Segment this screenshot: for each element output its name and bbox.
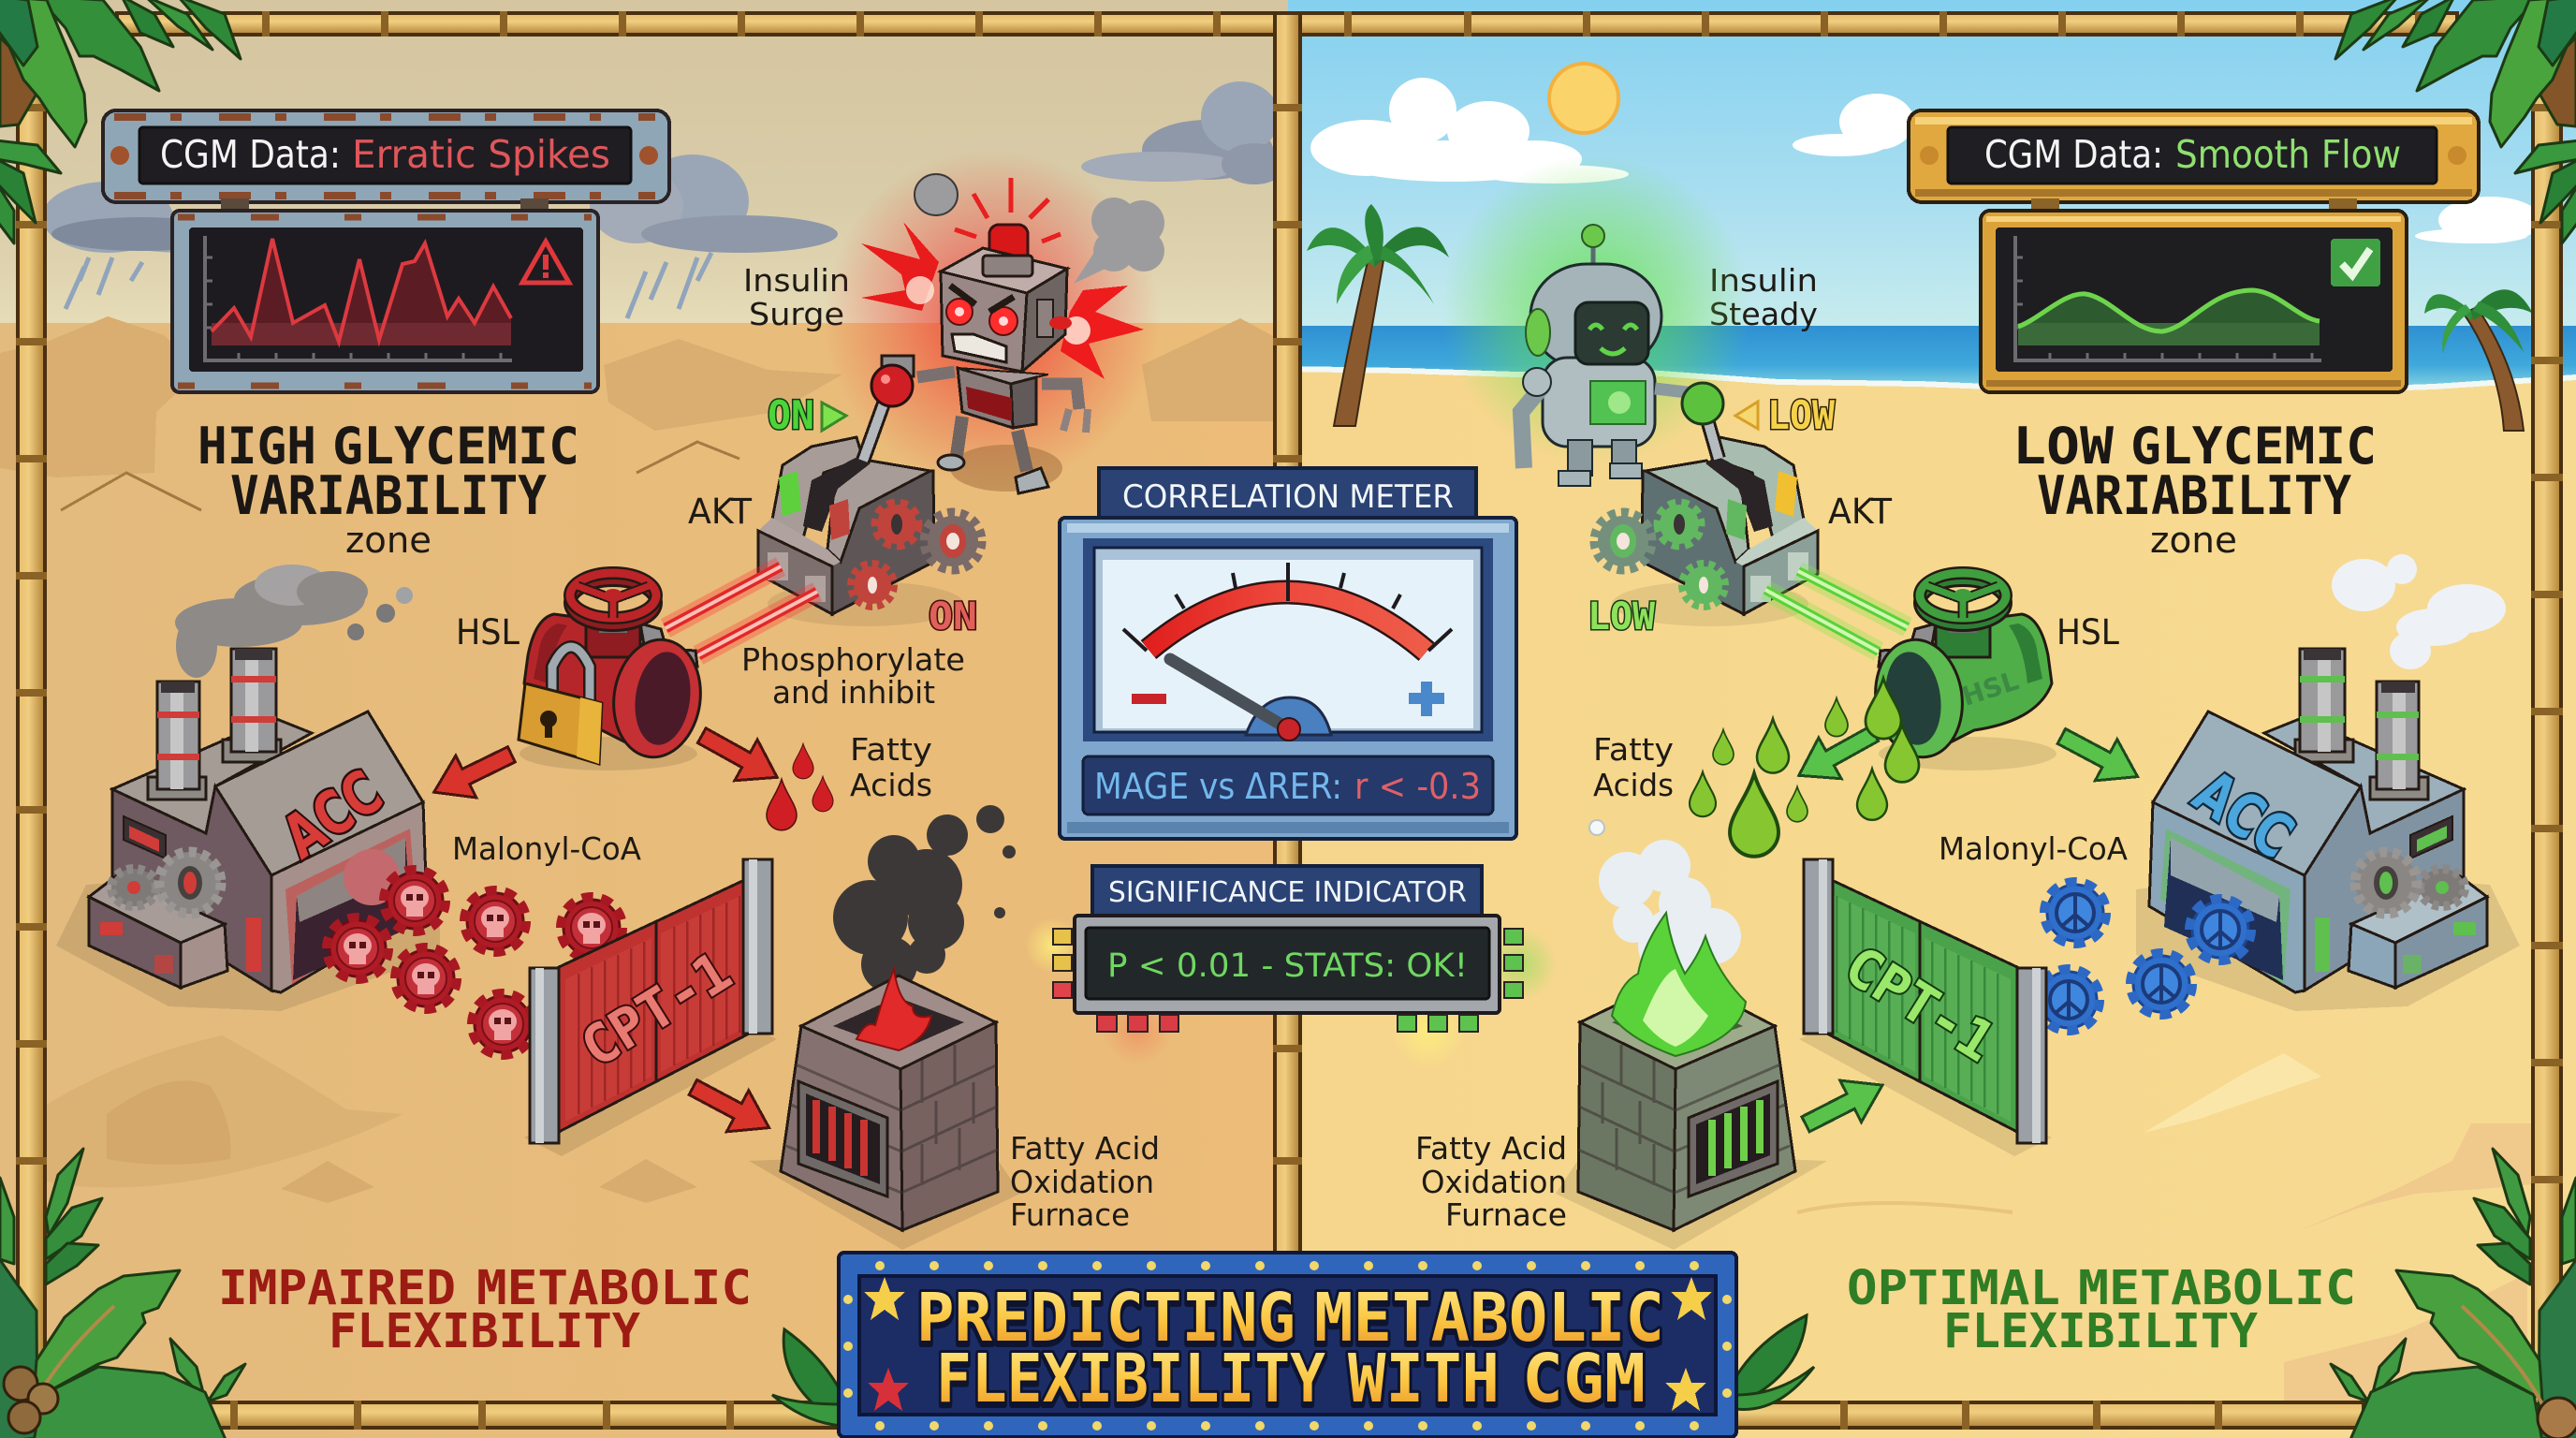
label: Fatty Acids left: Fatty <box>850 731 932 768</box>
label: Insulin Steady: Steady <box>1709 296 1818 332</box>
label: Malonyl-CoA right: Malonyl-CoA <box>1939 830 2128 867</box>
robot head <box>941 248 1067 372</box>
text: CPT-1 right: CPT-1 <box>1834 933 2006 1075</box>
icon: warning triangle <box>522 242 569 283</box>
heading: low glycemic variability zone: zone <box>2150 520 2237 561</box>
smoke: factory left <box>175 565 413 678</box>
icon: big blurred skull at door <box>344 849 400 905</box>
CPT-1 gate left <box>524 859 777 1156</box>
heading: optimal metabolic flexibility: METABOLIC <box>2078 1261 2356 1316</box>
CPT-1 gate right <box>1799 859 2052 1156</box>
gauge: needle <box>1170 659 1284 726</box>
clouds: storm clouds left <box>42 81 1287 318</box>
panel: significance indicator <box>1025 866 1557 1067</box>
text: CPT-1 left: CPT-1 <box>570 939 742 1080</box>
robot: angry red robot <box>824 150 1164 493</box>
gauge: red arc with ticks <box>1123 563 1452 652</box>
label: ON indicator green <box>768 392 846 438</box>
label: Fatty Acid Oxidation Furnace right <box>1415 1130 1567 1233</box>
text: HSL on pipe: HSL <box>1958 665 2023 712</box>
heading: low glycemic variability zone: GLYCEMIC <box>2130 417 2377 476</box>
ACC factory right <box>2136 649 2520 1011</box>
palm tree left on beach <box>1307 204 1449 426</box>
robot body <box>958 368 1048 428</box>
title text: FLEXIBILITY <box>936 1340 1325 1417</box>
label: Fatty Acids left <box>850 731 932 803</box>
label: Fatty Acids right <box>1593 731 1674 803</box>
bamboo: top rail <box>117 13 2457 35</box>
palm fronds: top-right corner <box>2335 0 2576 243</box>
heading tab: significance indicator: SIGNIFICANCE INDICATOR <box>1108 876 1467 909</box>
readout: MAGE vs delta RER: MAGE vs ΔRER: <box>1094 766 1342 807</box>
heading: impaired metabolic flexibility: METABOLIC <box>476 1261 752 1316</box>
text: ACC sign: ACC <box>271 757 395 873</box>
background: beach sky <box>1288 0 2576 332</box>
text: Erratic Spikes: Erratic Spikes <box>352 132 610 177</box>
robot: happy green robot <box>1442 154 1750 486</box>
label: Fatty Acid Oxidation Furnace left: Furnace <box>1010 1196 1130 1233</box>
panel: right CGM sign <box>1909 110 2479 202</box>
panel: correlation meter <box>1060 468 1516 839</box>
gauge: pivot <box>1278 718 1300 741</box>
HSL valve right <box>1868 573 2056 770</box>
palm leaves beside title <box>772 1315 1814 1426</box>
label: Fatty Acids right: Acids <box>1593 767 1674 803</box>
readout: p value: P < 0.01 - STATS: OK! <box>1107 947 1468 985</box>
furnace left <box>749 976 1020 1250</box>
chart: erratic glucose line <box>205 236 512 360</box>
arrow: red to fatty acids <box>691 715 788 798</box>
label: Fatty Acid Oxidation Furnace right: Furnace <box>1445 1196 1567 1233</box>
label: Insulin Steady <box>1709 262 1818 332</box>
heading: optimal metabolic flexibility: FLEXIBILITY <box>1943 1304 2258 1359</box>
smoke: black furnace smoke <box>833 805 1016 992</box>
label: Phosphorylate and inhibit <box>741 641 965 711</box>
icon: AKT lever right <box>1682 383 1723 459</box>
heading tab: correlation meter: CORRELATION METER <box>1122 478 1454 516</box>
heading: high glycemic variability zone: zone <box>345 520 432 561</box>
label: Malonyl-CoA left: Malonyl-CoA <box>452 830 641 867</box>
palm fronds: bottom-right corner <box>2331 1149 2576 1438</box>
marquee lights <box>848 1266 1727 1426</box>
AKT machine left <box>758 437 982 626</box>
label: Fatty Acids right: Fatty <box>1593 731 1674 768</box>
heading tab: correlation meter <box>1099 468 1476 519</box>
HSL valve left <box>520 573 708 770</box>
heading: low glycemic variability zone <box>2012 417 2377 561</box>
arrow: red laser beams <box>666 566 817 655</box>
background: desert sky <box>0 0 1288 337</box>
label: Fatty Acid Oxidation Furnace right: Oxidation <box>1421 1164 1567 1200</box>
heading: optimal metabolic flexibility <box>1847 1261 2356 1359</box>
stars <box>864 1277 1712 1411</box>
ACC factory left <box>56 649 440 1011</box>
heading: impaired metabolic flexibility: IMPAIRED <box>218 1261 456 1316</box>
text: CGM Data label right: CGM Data: <box>1984 132 2163 177</box>
label: Insulin Surge: Surge <box>749 296 844 332</box>
heading: high glycemic variability zone <box>198 417 579 561</box>
arrow: green to ACC <box>2051 715 2148 798</box>
icon: minus <box>1132 694 1166 704</box>
label: Phosphorylate and inhibit: Phosphorylate <box>741 641 965 678</box>
background: beach sand <box>1288 369 2576 1438</box>
arrow: red to ACC <box>424 733 521 814</box>
label: AKT left: AKT <box>688 492 752 532</box>
label: Insulin Steady: Insulin <box>1709 262 1818 299</box>
smoke: white furnace smoke <box>1589 820 1741 983</box>
bamboo: right post <box>2533 56 2561 1404</box>
label: Fatty Acid Oxidation Furnace right: Fatty Acid <box>1415 1130 1567 1167</box>
arrow: red to furnace <box>682 1066 780 1149</box>
heading: high glycemic variability zone: VARIABILITY <box>230 465 548 527</box>
bamboo: bottom rail <box>117 1402 2364 1428</box>
text: ACC sign right: ACC <box>2181 757 2305 873</box>
title text: WITH <box>1348 1340 1500 1417</box>
label: AKT right: AKT <box>1828 492 1892 532</box>
readout: MAGE vs delta RER <box>1083 756 1493 814</box>
title banner <box>839 1253 1736 1437</box>
icon: check mark <box>2331 239 2380 286</box>
icon: AKT lever left <box>863 356 914 461</box>
heading: low glycemic variability zone: VARIABILITY <box>2037 465 2352 527</box>
label: ON indicator green: ON <box>768 392 814 438</box>
label: Phosphorylate and inhibit: and inhibit <box>772 674 935 711</box>
arrow: green to fatty acids <box>1788 713 1885 796</box>
bamboo: left post <box>18 56 45 1404</box>
icon: plus <box>1409 682 1444 716</box>
label: Fatty Acids left: Acids <box>850 767 932 803</box>
icons: peace gears <box>2038 882 2251 1031</box>
arrow: green laser beams <box>1765 571 1908 652</box>
label: HSL right: HSL <box>2056 612 2119 653</box>
panel: right CGM chart monitor <box>1981 198 2407 392</box>
icon: green fatty acid drops <box>1690 679 1919 857</box>
icon: sun <box>1549 64 1618 133</box>
heading: high glycemic variability zone: GLYCEMIC <box>332 417 579 476</box>
title text <box>916 1279 1664 1417</box>
label: LOW indicator yellow <box>1735 392 1836 438</box>
palm fronds: top-left corner <box>0 0 241 243</box>
palm fronds: bottom-left corner <box>0 1149 245 1438</box>
text: Smooth Flow: Smooth Flow <box>2175 132 2401 177</box>
LED glows <box>1025 917 1557 1067</box>
label: Insulin Surge: Insulin <box>743 262 850 299</box>
panel: left CGM chart monitor <box>172 198 598 392</box>
label: Insulin Surge <box>743 262 850 332</box>
heading: high glycemic variability zone: HIGH <box>198 417 316 476</box>
heading: impaired metabolic flexibility <box>218 1261 752 1359</box>
icon: red flame <box>856 969 931 1050</box>
label: HSL left: HSL <box>456 612 520 653</box>
chart: smooth glucose line <box>2015 236 2321 360</box>
icons: skull gears <box>327 870 622 1055</box>
icon: green flame <box>1612 913 1746 1056</box>
furnace right <box>1556 976 1827 1250</box>
arrow: green to gate <box>1795 1064 1893 1145</box>
heading: low glycemic variability zone: LOW <box>2012 417 2115 476</box>
AKT machine right <box>1594 437 1818 626</box>
text: CGM Data label: CGM Data: <box>160 132 341 177</box>
label: ON indicator red: ON <box>929 595 977 638</box>
title text: PREDICTING <box>916 1279 1295 1357</box>
heading: impaired metabolic flexibility: FLEXIBILITY <box>329 1304 640 1359</box>
label: LOW indicator green: LOW <box>1588 595 1656 638</box>
label: LOW indicator yellow: LOW <box>1767 392 1836 438</box>
icon: padlock <box>519 647 602 764</box>
label: Fatty Acid Oxidation Furnace left: Oxidation <box>1010 1164 1154 1200</box>
LED lights <box>1053 929 1523 1032</box>
smoke: factory right <box>2332 554 2506 669</box>
heading tab: significance indicator <box>1092 866 1482 917</box>
icon: red fatty acid drops <box>767 743 833 830</box>
heading: optimal metabolic flexibility: OPTIMAL <box>1847 1261 2060 1316</box>
background: sea <box>1288 326 2576 391</box>
title text: CGM <box>1522 1340 1646 1417</box>
clouds: white clouds right <box>1310 78 2541 243</box>
label: Fatty Acid Oxidation Furnace left: Fatty Acid <box>1010 1130 1160 1167</box>
gauge: hub <box>1246 697 1331 735</box>
bamboo: centre divider <box>1275 13 1300 1258</box>
panel: left CGM sign <box>103 110 669 202</box>
palm tree right on beach <box>2424 289 2533 431</box>
title text: METABOLIC <box>1314 1279 1664 1357</box>
background: desert sand <box>0 316 1288 1438</box>
readout: MAGE vs delta RER: r < -0.3 <box>1354 766 1481 807</box>
label: Fatty Acid Oxidation Furnace left <box>1010 1130 1160 1233</box>
icon: flame core <box>1643 969 1708 1047</box>
